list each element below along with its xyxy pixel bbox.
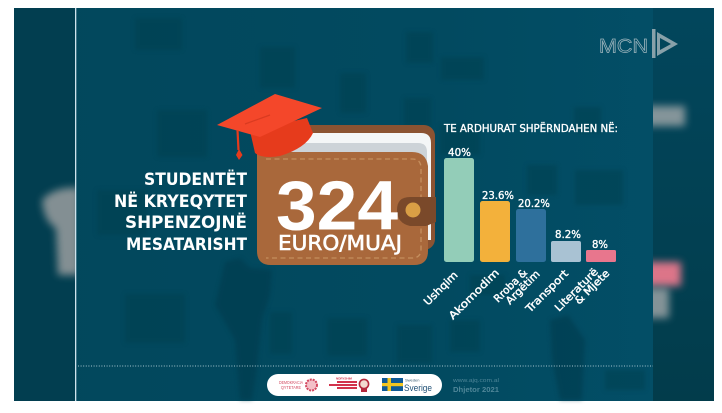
- bar: Akomodim 23.6%: 23.6%: [482, 190, 514, 202]
- logo: Demokracia: DEMOKRACIA: [279, 380, 303, 385]
- chart heading: TE ARDHURAT SHPËRNDAHEN NË:: [443, 122, 618, 135]
- logo: Sweden flag: [382, 378, 403, 391]
- wallet pages: [262, 133, 431, 240]
- bar: Transport 8.2%: Transport: [523, 268, 571, 316]
- building windows backdrop: [97, 18, 645, 390]
- cap tassel: [238, 130, 239, 150]
- heading: students spend on average: MESATARISHT: [126, 235, 248, 254]
- wallet front: [257, 152, 428, 265]
- right dark strip: [653, 8, 714, 401]
- logo: Demokracia: QYTETARE: [281, 385, 301, 390]
- amount: 324 euro per month: 324: [276, 166, 398, 244]
- logo: MCN TV: [599, 29, 678, 58]
- logo: Sweden Sverige wordmark: [404, 378, 432, 394]
- bar: Transport 8.2%: 8.2%: [555, 229, 581, 241]
- heading: students spend on average: [114, 170, 248, 254]
- heading: students spend on average: NË KRYEQYTET: [114, 192, 248, 211]
- amount: 324 euro per month: EURO/MUAJ: [278, 231, 402, 255]
- bar: Literaturë & Mjete 8%: Literaturë: [553, 266, 601, 314]
- bar: Rroba & Argëtim 20.2%: Argëtim: [504, 268, 543, 307]
- heading: students spend on average: SHPENZOJNË: [125, 213, 247, 232]
- bar: Literaturë & Mjete 8%: [553, 239, 616, 314]
- partner logos pill: [267, 374, 442, 396]
- wallet stitching: [266, 159, 421, 258]
- bar: Ushqim 40%: [422, 147, 474, 308]
- dotted footer divider: [78, 365, 653, 367]
- logo: Sweden Sverige wordmark: Sweden: [405, 378, 419, 382]
- icon: graduation cap: [217, 94, 322, 160]
- bar: Akomodim 23.6%: Akomodim: [447, 267, 502, 322]
- bar: Transport 8.2%: [523, 229, 581, 316]
- bar: Rroba & Argëtim 20.2%: 20.2%: [518, 198, 550, 210]
- bar: Literaturë & Mjete 8%: 8%: [592, 239, 608, 251]
- logo: second partner: [329, 376, 369, 392]
- logo: Sweden Sverige wordmark: Sverige: [404, 383, 432, 394]
- vertical divider line: [75, 8, 76, 401]
- wallet back: [258, 125, 435, 250]
- tree silhouettes: [215, 258, 585, 400]
- bar: Ushqim 40%: Ushqim: [422, 269, 461, 308]
- bar: Literaturë & Mjete 8%: & Mjete: [573, 268, 612, 307]
- bar: Rroba & Argëtim 20.2%: [492, 198, 550, 307]
- bar: Akomodim 23.6%: [447, 190, 514, 322]
- footer source and date: www.ajq.com.al: [452, 378, 499, 384]
- footer source and date: Dhjetor 2021: [453, 387, 499, 394]
- wallet clasp: [397, 197, 436, 226]
- logo: Demokracia: [279, 380, 317, 390]
- logo: MCN TV: MCN: [599, 36, 648, 58]
- bar chart: income distribution: [422, 147, 616, 322]
- logo: second partner: NDRYSHIM: [336, 376, 352, 380]
- footer source and date: [452, 378, 499, 394]
- bar: Rroba & Argëtim 20.2%: Rroba &: [492, 267, 530, 305]
- left dark strip: [14, 8, 80, 401]
- heading: students spend on average: STUDENTËT: [144, 170, 248, 189]
- icon: wallet: [257, 125, 436, 265]
- bar: Ushqim 40%: 40%: [448, 147, 471, 159]
